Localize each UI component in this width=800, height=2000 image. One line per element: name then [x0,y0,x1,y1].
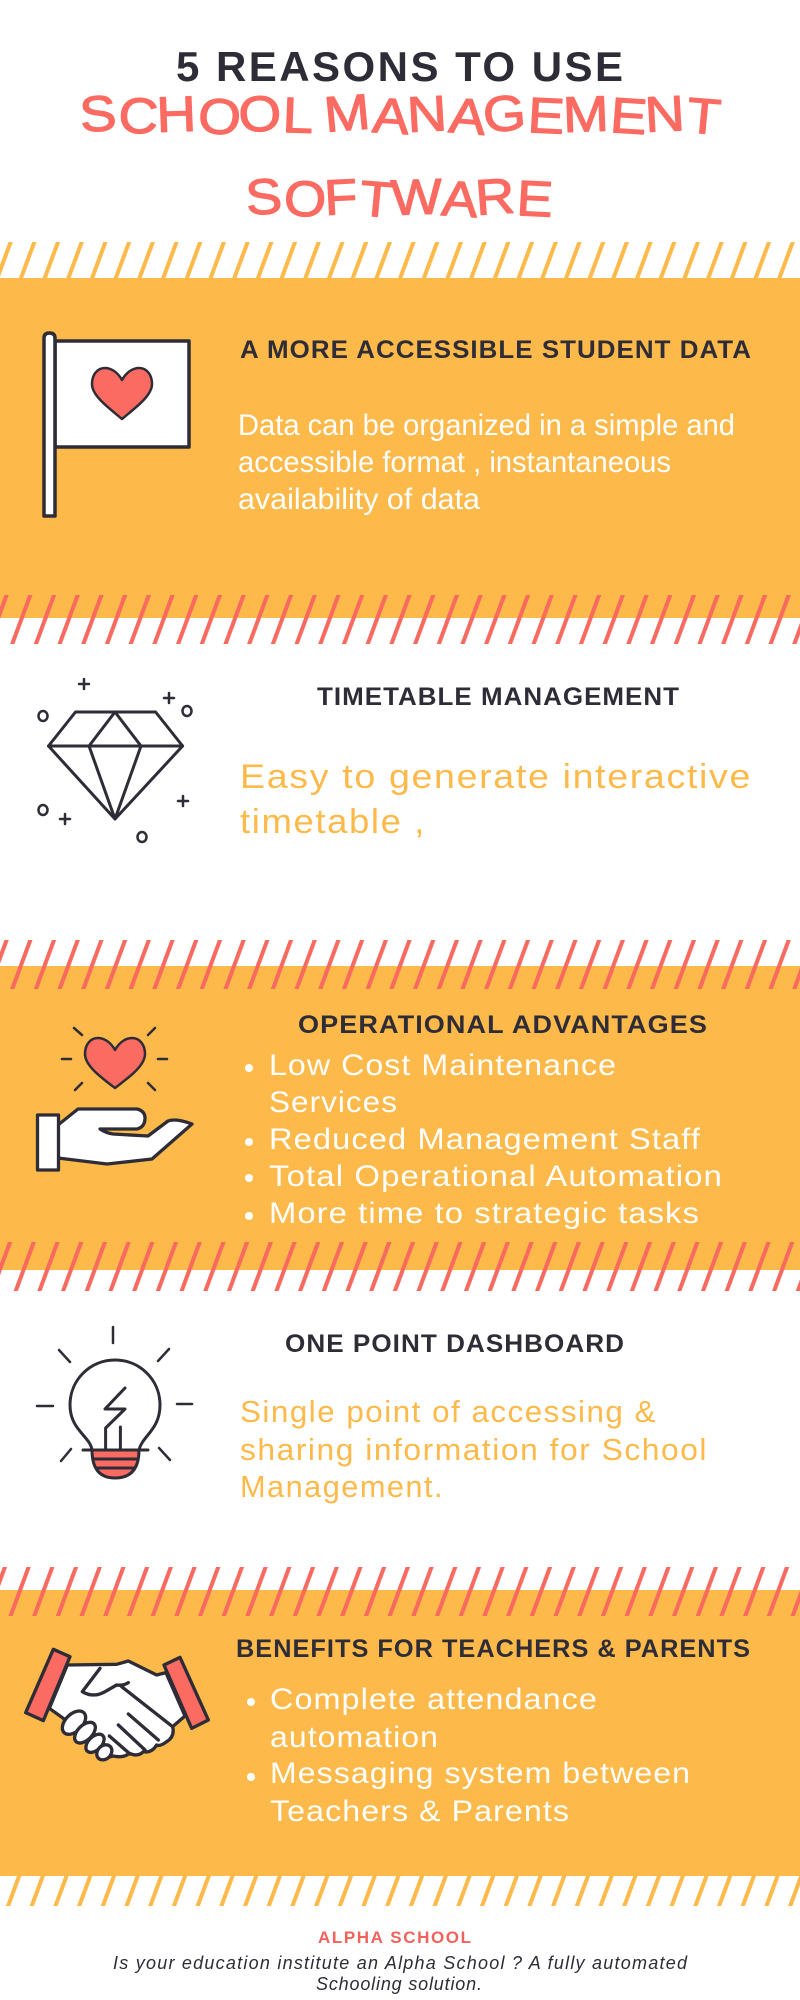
icon: handshake [26,1649,208,1763]
body text: Management. [240,1469,444,1504]
bullet list: Complete attendance [270,1683,598,1716]
footer tagline [113,1953,688,1994]
bullet list: automation [270,1721,439,1754]
panel: timetable management [0,618,800,966]
body text: accessible format , instantaneous [238,446,671,479]
heading: ONE POINT DASHBOARD [285,1330,625,1358]
bullet list: Total Operational Automation [269,1160,723,1193]
heading: BENEFITS FOR TEACHERS & PARENTS [236,1635,751,1663]
panel: operational advantages [0,966,800,1270]
icon: flag with heart [44,333,189,516]
title line: software: SOFTWARE [244,167,554,229]
bullet list: Services [269,1086,398,1119]
bullet list [245,1049,723,1230]
footer [113,1928,688,1994]
bullet list: More time to strategic tasks [269,1197,700,1230]
panel: benefits for teachers and parents [0,1590,800,1876]
icon: hand holding heart [38,1028,192,1170]
body text: sharing information for School [240,1432,708,1467]
heading: A MORE ACCESSIBLE STUDENT DATA [240,336,752,364]
heading: OPERATIONAL ADVANTAGES [298,1011,708,1039]
panel: accessible student data [0,278,800,618]
body text: Single point of accessing & [240,1394,657,1429]
body text: timetable , [240,803,426,841]
body text [240,758,752,841]
body text: availability of data [238,483,480,516]
bullet list: Reduced Management Staff [269,1123,701,1156]
bullet list [247,1683,691,1828]
bullet list: Low Cost Maintenance [269,1049,617,1082]
title line: 5 reasons to use: 5 REASONS TO USE [176,43,623,90]
icon: diamond with sparkles [38,679,192,842]
footer tagline: Schooling solution. [316,1974,482,1994]
bullet list: Teachers & Parents [270,1795,570,1828]
body text: Data can be organized in a simple and [238,409,735,442]
body text [240,1394,708,1504]
icon: light bulb [37,1327,192,1478]
heading: TIMETABLE MANAGEMENT [317,683,680,711]
footer heading: ALPHA SCHOOL [318,1928,471,1947]
footer tagline: Is your education institute an Alpha School ? A fully automated [113,1953,688,1973]
panel: one point dashboard [0,1270,800,1590]
bullet list: Messaging system between [270,1757,691,1790]
body text: Easy to generate interactive [240,758,752,796]
title line: school management: SCHOOL MANAGEMENT [78,83,723,147]
title [78,43,723,229]
body text [238,409,735,516]
